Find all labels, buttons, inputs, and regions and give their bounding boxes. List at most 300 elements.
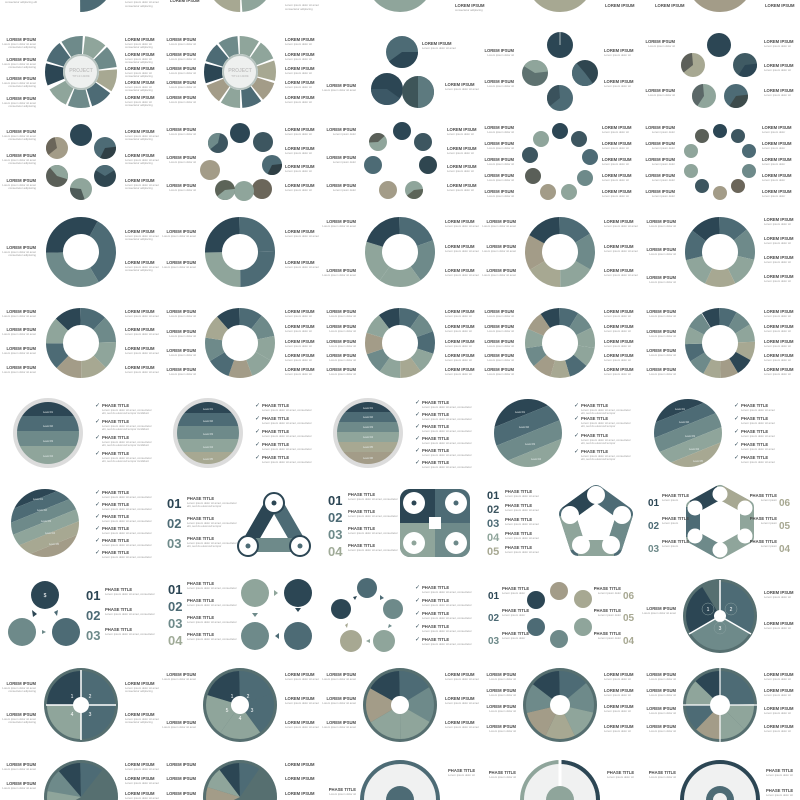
row 5 col 0 checklist: PHASE TITLE <box>102 403 129 408</box>
row 6 col 2: numbered list 01-04: 03 <box>328 527 342 542</box>
row 6 col 0 checklist: ✓ <box>95 525 100 532</box>
row 5 col 1 checklist: Lorem ipsum dolor sit amet, consectetur <box>262 421 312 425</box>
row 2 col 4: ten small pies ring: Lorem ipsum dolor <box>762 178 785 182</box>
row 3 col 1: four segment donut: LOREM IPSUM <box>166 260 197 265</box>
row 4 col 0: eight segment donut: Lorem ipsum dolor sit amet <box>125 351 159 355</box>
row 2 col 0: six small pies ring: consectetur adipiscing <box>8 137 36 141</box>
row 3 col 2: five segment donut: Lorem ipsum dolor sit amet <box>322 273 356 277</box>
row 6 col 2: numbered list 01-04: PHASE TITLE <box>348 492 375 497</box>
row 5 col 4 checklist: PHASE TITLE <box>741 442 768 447</box>
row 7 col 3: six circle cycle with numbers: 01 <box>488 591 500 602</box>
row 1 col 3: four pies: LOREM IPSUM <box>604 48 634 53</box>
row 7 col 0: three circle cycle: $ <box>44 593 47 599</box>
row 7 col 2: five circle cycle: PHASE TITLE <box>422 598 449 603</box>
row 5 col 2 checklist: Lorem ipsum dolor sit amet, consectetur <box>422 441 472 445</box>
row 5 col 0 checklist: elit, sed do eiusmod tempor incididunt <box>102 427 149 431</box>
row 3 col 2: five segment donut <box>322 219 479 278</box>
row 7 col 2: five circle cycle: Lorem ipsum dolor sit amet, consectetur <box>422 590 472 594</box>
row 8 col 2: six segment numbered pie: LOREM IPSUM <box>445 672 475 677</box>
row 8 col 2: six segment numbered pie: LOREM IPSUM <box>326 672 357 677</box>
row 4 col 3: eleven segment donut <box>484 309 634 376</box>
row 8 col 2: six segment numbered pie: Lorem ipsum dolor sit amet <box>445 725 479 729</box>
row 8 col 1: five segment numbered pie: 2 <box>247 694 250 700</box>
row 9: partial pies and rings at bottom: Lorem ipsum dolor sit amet <box>125 767 159 771</box>
row 5 col 3 checklist: elit, sed do eiusmod tempor <box>581 411 615 415</box>
row 8 col 0: four segment numbered pie: LOREM IPSUM <box>125 712 155 717</box>
row 3 col 3: six segment donut <box>482 219 638 278</box>
row 6 col 1: numbered list 01-03: PHASE TITLE <box>187 516 214 521</box>
row 4 col 3: eleven segment donut: Lorem ipsum dolor sit <box>487 314 514 318</box>
row 8 col 1: five segment numbered pie: LOREM IPSUM <box>166 672 197 677</box>
row 3 col 4: seven segment donut: LOREM IPSUM <box>764 255 794 260</box>
row 8 col 0: four segment numbered pie: 2 <box>89 694 92 700</box>
row 1 col 0 texts <box>2 37 155 108</box>
row 7 col 4: three segment numbered pie: Lorem ipsum dolor sit <box>764 626 791 630</box>
row 6 col 3: numbered list 01-05: Lorem ipsum dolor sit amet <box>505 550 539 554</box>
row 1 col 3: four pies: Lorem ipsum dolor sit <box>487 84 514 88</box>
row 5 col 4 checklist: PHASE TITLE <box>741 416 768 421</box>
row 3 col 1: four segment donut: LOREM IPSUM <box>285 260 315 265</box>
row 7 col 3: six circle cycle with numbers: PHASE TITLE <box>502 586 529 591</box>
row 6 col 0: tilted band circle 6 levels <box>11 489 79 557</box>
row 2 col 3: nine small pies ring: Lorem ipsum dolor sit <box>487 146 514 150</box>
row 1 col 3: four pies: Lorem ipsum dolor sit <box>604 53 631 57</box>
row 4 col 3: eleven segment donut: Lorem ipsum dolor sit <box>604 372 631 376</box>
row 5 col 3 checklist <box>574 402 631 461</box>
row 8 col 0: four segment numbered pie: LOREM IPSUM <box>6 712 37 717</box>
row 5 col 3 checklist: Lorem ipsum dolor sit amet, consectetur <box>581 421 631 425</box>
row 1 col 0 texts: consectetur adipiscing <box>125 60 153 64</box>
row 5 col 4 checklist: ✓ <box>734 415 739 422</box>
row 7 col 3: six circle cycle with numbers: Lorem ipsum dolor <box>502 636 525 640</box>
row 3 col 2: five segment donut: LOREM IPSUM <box>445 268 475 273</box>
row 2 col 4: ten small pies ring: Lorem ipsum dolor <box>652 194 675 198</box>
row 5 col 0 checklist: Lorem ipsum dolor sit amet, consectetur <box>102 440 152 444</box>
row 1 col 1 texts: LOREM IPSUM <box>285 52 315 57</box>
row 6 col 1: numbered list 01-03: elit, sed do eiusmod tempor <box>187 544 221 548</box>
row 5 col 2 checklist: ✓ <box>415 459 420 466</box>
row 5 col 1 checklist <box>255 402 312 464</box>
row 6 col 4: hexagon cycle with numbers: Lorem ipsum <box>662 544 679 548</box>
row 8 col 3: seven segment numbered pie: LOREM IPSUM <box>604 724 634 729</box>
row 5 col 1: layered circle 5 levels: Level 03 <box>203 432 213 436</box>
row 7 col 3: six circle cycle with numbers: Lorem ipsum dolor <box>598 613 621 617</box>
row 5 col 4: tilted band circle 5 levels: Level 05 <box>693 459 703 463</box>
row 8 col 4: eight segment numbered pie <box>646 668 794 742</box>
row 2 col 0: six small pies ring: LOREM IPSUM <box>6 178 37 183</box>
row 1 col 2: three pies: Lorem ipsum dolor sit amet <box>422 46 456 50</box>
row 5 col 2 checklist: PHASE TITLE <box>422 460 449 465</box>
row 4 col 0: eight segment donut: LOREM IPSUM <box>125 309 155 314</box>
row 8 col 3: seven segment numbered pie: Lorem ipsum dolor sit <box>489 709 516 713</box>
row 3 col 3: six segment donut: Lorem ipsum dolor sit amet <box>604 224 638 228</box>
row 8 col 3: seven segment numbered pie: LOREM IPSUM <box>604 672 634 677</box>
row 8 col 4: eight segment numbered pie: LOREM IPSUM <box>764 688 794 693</box>
row 7 col 3: six circle cycle with numbers: 02 <box>488 613 500 624</box>
row 6 col 3: pentagon cycle <box>561 486 631 554</box>
row 3 col 1: four segment donut: LOREM IPSUM <box>166 229 197 234</box>
row 4 col 1: nine segment donut: LOREM IPSUM <box>166 348 197 353</box>
row 9: partial pies and rings at bottom <box>2 758 793 800</box>
row 1 col 1: ten segment ring: PROJECT <box>228 68 252 74</box>
row 5 col 2 checklist: Lorem ipsum dolor sit amet, consectetur <box>422 429 472 433</box>
row 9: partial pies and rings at bottom: LOREM IPSUM <box>125 776 155 781</box>
row 8 col 4: eight segment numbered pie: Lorem ipsum dolor sit <box>649 729 676 733</box>
row 6 col 3: numbered list 01-05: Lorem ipsum dolor sit amet <box>505 536 539 540</box>
row 4 col 0: eight segment donut: Lorem ipsum dolor sit amet <box>125 332 159 336</box>
row 5 col 2: layered circle 6 levels: Level 03 <box>363 425 373 429</box>
row 3 col 4: seven segment donut: LOREM IPSUM <box>764 236 794 241</box>
row 4 col 0: eight segment donut: Lorem ipsum dolor sit amet <box>2 332 36 336</box>
row 6 col 0 checklist: Lorem ipsum dolor sit amet, consectetur <box>102 507 152 511</box>
row 6 col 4: hexagon cycle with numbers: PHASE TITLE <box>750 539 777 544</box>
row 2 col 1: eight small pies ring: LOREM IPSUM <box>285 127 315 132</box>
row 6 col 4: hexagon cycle with numbers: Lorem ipsum <box>662 498 679 502</box>
row 2 col 3: nine small pies ring: LOREM IPSUM <box>602 125 632 130</box>
row 4 col 2: ten segment donut <box>326 309 475 376</box>
row 7 col 1: four circle cycle: 01 <box>168 582 182 597</box>
row 8 col 4: eight segment numbered pie: Lorem ipsum dolor sit <box>649 693 676 697</box>
row 5 col 2 checklist: ✓ <box>415 423 420 430</box>
row 5 col 0: layered circle 4 levels: Level 02 <box>43 424 53 428</box>
row 5 col 3 checklist: PHASE TITLE <box>581 433 608 438</box>
row 4 col 3: eleven segment donut: Lorem ipsum dolor sit <box>604 329 631 333</box>
row 7 col 2: five circle cycle: PHASE TITLE <box>422 624 449 629</box>
row 3 col 0: three segment donut: consectetur adipiscing <box>125 268 153 272</box>
row 2 col 1: eight small pies ring: LOREM IPSUM <box>166 183 197 188</box>
row 7 col 4: three segment numbered pie: 1 <box>707 607 710 613</box>
row 5 col 0 checklist: ✓ <box>95 402 100 409</box>
row 3 col 4: seven segment donut <box>646 217 794 284</box>
row 2 col 4: ten small pies ring: LOREM IPSUM <box>645 173 676 178</box>
row 7 col 2: five circle cycle: ✓ <box>415 636 420 643</box>
row 4 col 3: eleven segment donut: LOREM IPSUM <box>484 309 515 314</box>
row 2 col 1: eight small pies ring: Lorem ipsum dolor sit <box>169 132 196 136</box>
row 3 col 3: six segment donut: Lorem ipsum dolor sit amet <box>604 249 638 253</box>
row 9: partial pies and rings at bottom: PHASE TITLE <box>766 768 793 773</box>
row 4 col 4: twelve segment donut: LOREM IPSUM <box>646 309 677 314</box>
row 1 col 2: three pies: LOREM IPSUM <box>422 41 452 46</box>
row 1 col 0 texts: Lorem ipsum dolor sit amet <box>2 81 36 85</box>
row 8 col 4: eight segment numbered pie: Lorem ipsum dolor sit <box>649 677 676 681</box>
row 4 col 1: nine segment donut: Lorem ipsum dolor sit <box>169 314 196 318</box>
row 3 col 4: seven segment donut: Lorem ipsum dolor sit <box>764 279 791 283</box>
row 6 col 1: numbered list 01-03: elit, sed do eiusmod tempor <box>187 504 221 508</box>
row 1 col 1 texts: LOREM IPSUM <box>285 37 315 42</box>
row 1 col 1 texts: Lorem ipsum dolor sit <box>169 57 196 61</box>
row 8 col 3: seven segment numbered pie: Lorem ipsum dolor sit <box>604 709 631 713</box>
row 1 col 0 texts: LOREM IPSUM <box>125 37 155 42</box>
row 1 col 1 texts: Lorem ipsum dolor sit <box>169 85 196 89</box>
row 4 col 2: ten segment donut: LOREM IPSUM <box>445 353 475 358</box>
row 5 col 2 checklist <box>415 399 472 469</box>
row 7 col 4: three segment numbered pie: Lorem ipsum dolor sit amet <box>642 611 676 615</box>
row 7 col 0: three circle cycle: 03 <box>86 628 100 643</box>
row 8 col 2: six segment numbered pie: Lorem ipsum dolor sit amet <box>445 701 479 705</box>
row 3 col 1: four segment donut: Lorem ipsum dolor sit amet <box>162 265 196 269</box>
row 1 col 4: five pies: LOREM IPSUM <box>764 88 794 93</box>
row 6 col 4: hexagon cycle with numbers: PHASE TITLE <box>662 516 689 521</box>
row 1 col 0 texts: LOREM IPSUM <box>6 37 37 42</box>
row 6 col 0 checklist: ✓ <box>95 537 100 544</box>
row 8 col 2: six segment numbered pie <box>322 668 479 742</box>
row 2 col 3: nine small pies ring: Lorem ipsum dolor sit <box>602 146 629 150</box>
row 6 col 4: hexagon cycle with numbers: 03 <box>648 544 660 555</box>
row 2 col 2: seven small pies ring: LOREM IPSUM <box>447 164 477 169</box>
row 6 col 0: tilted band circle 6 levels: Level 02 <box>37 508 47 512</box>
row 3 col 1: four segment donut: Lorem ipsum dolor sit amet <box>285 265 319 269</box>
row 1 col 1 texts: LOREM IPSUM <box>166 37 197 42</box>
row 6 col 1: numbered list 01-03: Lorem ipsum dolor sit amet, consectetur <box>187 521 237 525</box>
row 4 col 4: twelve segment donut: LOREM IPSUM <box>764 339 794 344</box>
row 7 col 1: four circle cycle <box>168 579 312 650</box>
row 3 col 3: six segment donut: LOREM IPSUM <box>486 268 517 273</box>
row 5 col 4 checklist: PHASE TITLE <box>741 455 768 460</box>
row 6 col 4: hexagon cycle with numbers: PHASE TITLE <box>662 493 689 498</box>
row 5 col 3: tilted band circle 4 levels: Level 02 <box>519 425 529 429</box>
row 1 col 0: nine segment ring with project title: TITLE HERE <box>72 74 90 78</box>
row 6 col 3: numbered list 01-05: 02 <box>487 504 499 516</box>
row 4 col 2: ten segment donut: Lorem ipsum dolor sit <box>329 344 356 348</box>
row 6 col 0 checklist: Lorem ipsum dolor sit amet, consectetur <box>102 519 152 523</box>
row 1 col 0 texts: Lorem ipsum dolor sit <box>125 57 152 61</box>
row 5 col 4: tilted band circle 5 levels: Level 01 <box>675 407 685 411</box>
row 8 col 3: seven segment numbered pie: LOREM IPSUM <box>604 688 634 693</box>
row 2 col 3: nine small pies ring: Lorem ipsum dolor sit <box>487 194 514 198</box>
row 1 col 1 texts: LOREM IPSUM <box>166 66 197 71</box>
row 4 col 2: ten segment donut: Lorem ipsum dolor sit <box>445 372 472 376</box>
row 2 col 1: eight small pies ring: Lorem ipsum dolor sit <box>169 188 196 192</box>
row 4 col 3: eleven segment donut: Lorem ipsum dolor sit <box>604 358 631 362</box>
row 1 col 0 texts: Lorem ipsum dolor sit amet <box>2 42 36 46</box>
row 6 col 3: numbered list 01-05: 05 <box>487 546 499 558</box>
row 7 col 1: four circle cycle: Lorem ipsum dolor sit amet, consectetur <box>187 586 237 590</box>
row 8 col 2: six segment numbered pie: LOREM IPSUM <box>445 696 475 701</box>
row 2 col 4: ten small pies ring: LOREM IPSUM <box>762 157 792 162</box>
row 9: partial pies and rings at bottom: LOREM IPSUM <box>285 762 315 767</box>
row 7 col 3: six circle cycle with numbers: 05 <box>623 613 635 624</box>
row 5 col 3: tilted band circle 4 levels: Level 04 <box>531 457 541 461</box>
row 2 col 2: seven small pies ring: Lorem ipsum dolor <box>333 160 356 164</box>
row 4 col 2: ten segment donut: LOREM IPSUM <box>326 324 357 329</box>
row 5 col 3 checklist: ✓ <box>574 432 579 439</box>
row 1 col 0 texts: LOREM IPSUM <box>6 76 37 81</box>
row 5 col 2: layered circle 6 levels: Level 04 <box>363 435 373 439</box>
row 6 col 2: numbered list 01-04: PHASE TITLE <box>348 509 375 514</box>
row 5 col 0: layered circle 4 levels: Level 03 <box>43 439 53 443</box>
row 9: partial pies and rings at bottom: PHASE TITLE <box>489 770 516 775</box>
row 4 col 4: twelve segment donut: Lorem ipsum dolor sit <box>764 358 791 362</box>
row 8 col 3: seven segment numbered pie: LOREM IPSUM <box>486 688 517 693</box>
row 1 col 4: five pies: Lorem ipsum dolor sit <box>764 93 791 97</box>
row 9: partial pies and rings at bottom: Lorem ipsum dolor sit amet <box>125 796 159 800</box>
row 5 col 2 checklist: ✓ <box>415 447 420 454</box>
row 6 col 2: numbered list 01-04: 01 <box>328 493 342 508</box>
row 6 col 3: numbered list 01-05: Lorem ipsum dolor sit amet <box>505 508 539 512</box>
row 7 col 4: three segment numbered pie: 2 <box>730 607 733 613</box>
row 5 col 0 checklist: elit, sed do eiusmod tempor incididunt <box>102 443 149 447</box>
row 6 col 3: numbered list 01-05: Lorem ipsum dolor sit amet <box>505 494 539 498</box>
row 3 col 4: seven segment donut: Lorem ipsum dolor sit <box>649 252 676 256</box>
row 1 col 1 texts: LOREM IPSUM <box>166 52 197 57</box>
row 1 col 0 texts: Lorem ipsum dolor sit <box>125 100 152 104</box>
row 8 col 3: seven segment numbered pie: Lorem ipsum dolor sit <box>489 729 516 733</box>
row 9: partial pies and rings at bottom: LOREM IPSUM <box>166 762 197 767</box>
row 6 col 0: tilted band circle 6 levels: Level 01 <box>33 497 43 501</box>
row 0: partial pies at top: consectetur adipiscing <box>455 8 483 12</box>
row 8 col 3: seven segment numbered pie: Lorem ipsum dolor sit <box>604 729 631 733</box>
row 3 col 3: six segment donut: LOREM IPSUM <box>486 244 517 249</box>
row 7 col 1: four circle cycle: PHASE TITLE <box>187 598 214 603</box>
row 8 col 0: four segment numbered pie: 4 <box>71 712 74 718</box>
row 2 col 1: eight small pies ring: LOREM IPSUM <box>285 146 315 151</box>
row 3 col 4: seven segment donut: LOREM IPSUM <box>764 217 794 222</box>
row 6 col 0 checklist: PHASE TITLE <box>102 550 129 555</box>
row 3 col 4: seven segment donut: Lorem ipsum dolor sit <box>649 280 676 284</box>
row 1 col 4: five pies: LOREM IPSUM <box>645 39 676 44</box>
row 5 col 1 checklist: Lorem ipsum dolor sit amet, consectetur <box>262 447 312 451</box>
row 1 col 0 texts: LOREM IPSUM <box>6 57 37 62</box>
row 5 col 1 checklist: ✓ <box>255 402 260 409</box>
row 9: partial pies and rings at bottom: Lorem ipsum dolor sit <box>766 773 793 777</box>
row 2 col 3: nine small pies ring: LOREM IPSUM <box>602 189 632 194</box>
row 2 col 4: ten small pies ring: Lorem ipsum dolor <box>652 178 675 182</box>
row 3 col 1: four segment donut: Lorem ipsum dolor sit amet <box>162 234 196 238</box>
row 1 col 0 texts: Lorem ipsum dolor sit <box>125 42 152 46</box>
row 9: partial pies and rings at bottom: PHASE TITLE <box>329 787 356 792</box>
row 1 col 0 texts: Lorem ipsum dolor sit <box>125 71 152 75</box>
row 6 col 2: numbered list 01-04: 02 <box>328 510 342 525</box>
row 9: partial pies and rings at bottom: Lorem ipsum dolor sit <box>329 792 356 796</box>
row 0: partial pies at top: consectetur adipiscing <box>125 4 153 8</box>
row 1 col 1 texts: LOREM IPSUM <box>285 66 315 71</box>
row 4 col 2: ten segment donut: Lorem ipsum dolor sit <box>445 358 472 362</box>
row 8 col 4: eight segment numbered pie: LOREM IPSUM <box>764 672 794 677</box>
row 7 col 2: five circle cycle: Lorem ipsum dolor sit amet, consectetur <box>422 603 472 607</box>
row 5 col 2 checklist: PHASE TITLE <box>422 412 449 417</box>
row 7 col 2: five circle cycle: Lorem ipsum dolor sit amet, consectetur <box>422 616 472 620</box>
row 6 col 2: numbered list 01-04: Lorem ipsum dolor sit amet, consectetur <box>348 531 398 535</box>
row 6 col 4: hexagon cycle with numbers: Lorem ipsum <box>761 544 778 548</box>
row 2 col 0: six small pies ring: LOREM IPSUM <box>125 153 155 158</box>
row 8 col 0: four segment numbered pie: LOREM IPSUM <box>125 681 155 686</box>
row 4 col 2: ten segment donut: LOREM IPSUM <box>326 367 357 372</box>
row 7 col 1: four circle cycle: Lorem ipsum dolor sit amet, consectetur <box>187 637 237 641</box>
row 4 col 4: twelve segment donut: Lorem ipsum dolor sit <box>649 353 676 357</box>
row 7 col 0: three circle cycle: Lorem ipsum dolor sit amet, consectetur <box>105 592 155 596</box>
row 6 col 1: numbered list 01-03: 02 <box>167 516 181 531</box>
row 5 col 3 checklist: Lorem ipsum dolor sit amet, consectetur <box>581 454 631 458</box>
row 4 col 0: eight segment donut: LOREM IPSUM <box>6 365 37 370</box>
row 2 col 2: seven small pies ring: Lorem ipsum dolor sit <box>447 132 474 136</box>
row 2 col 4: ten small pies ring: Lorem ipsum dolor <box>762 162 785 166</box>
row 1 col 0 texts: Lorem ipsum dolor sit amet <box>2 101 36 105</box>
row 3 col 2: five segment donut: LOREM IPSUM <box>445 244 475 249</box>
row 8 col 3: seven segment numbered pie: LOREM IPSUM <box>486 672 517 677</box>
row 2 col 0: six small pies ring: consectetur adipiscing <box>125 161 153 165</box>
row 8 col 4: eight segment numbered pie: Lorem ipsum dolor sit <box>764 693 791 697</box>
row 3 col 0: three segment donut: LOREM IPSUM <box>6 245 37 250</box>
row 2 col 4: ten small pies ring: Lorem ipsum dolor <box>762 130 785 134</box>
row 7 col 3: six circle cycle with numbers: 03 <box>488 636 500 647</box>
row 6 col 0: tilted band circle 6 levels: Level 03 <box>41 519 51 523</box>
row 8 col 0: four segment numbered pie: consectetur adipiscing <box>8 720 36 724</box>
row 3 col 2: five segment donut: LOREM IPSUM <box>326 219 357 224</box>
row 2 col 4: ten small pies ring: Lorem ipsum dolor <box>762 194 785 198</box>
row 2 col 1: eight small pies ring: Lorem ipsum dolor sit <box>285 132 312 136</box>
row 1 col 4: five pies: Lorem ipsum dolor sit <box>648 93 675 97</box>
row 2 col 0: six small pies ring: Lorem ipsum dolor sit amet <box>125 183 159 187</box>
row 2 col 4: ten small pies ring: LOREM IPSUM <box>762 125 792 130</box>
row 2 col 3: nine small pies ring: Lorem ipsum dolor sit <box>602 194 629 198</box>
row 8 col 1: five segment numbered pie: 3 <box>251 708 254 714</box>
row 1 col 0: nine segment ring with project title: PROJECT <box>69 68 93 74</box>
row 2 col 0: six small pies ring: LOREM IPSUM <box>125 178 155 183</box>
row 9: partial pies and rings at bottom: Lorem ipsum dolor sit amet <box>2 786 36 790</box>
row 8 col 0: four segment numbered pie <box>2 668 159 742</box>
row 8 col 0: four segment numbered pie: consectetur adipiscing <box>8 689 36 693</box>
row 2 col 1: eight small pies ring <box>166 123 315 201</box>
row 8 col 1: five segment numbered pie: 4 <box>239 716 242 722</box>
row 4 col 1: nine segment donut: Lorem ipsum dolor sit <box>285 358 312 362</box>
row 6 col 3: numbered list 01-05: PHASE TITLE <box>505 545 532 550</box>
row 6 col 0 checklist: PHASE TITLE <box>102 526 129 531</box>
row 7 col 3: six circle cycle with numbers: 04 <box>623 636 635 647</box>
row 5 col 4 checklist: Lorem ipsum dolor sit amet <box>741 460 775 464</box>
row 8 col 1: five segment numbered pie: LOREM IPSUM <box>166 720 197 725</box>
row 6 col 1: numbered list 01-03: PHASE TITLE <box>187 536 214 541</box>
row 5 col 2 checklist: Lorem ipsum dolor sit amet, consectetur <box>422 453 472 457</box>
row 1 col 3: four pies: LOREM IPSUM <box>604 79 634 84</box>
row 5 col 2 checklist: ✓ <box>415 435 420 442</box>
row 4 col 2: ten segment donut: Lorem ipsum dolor sit <box>329 372 356 376</box>
row 4 col 3: eleven segment donut: Lorem ipsum dolor sit <box>487 344 514 348</box>
row 5 col 4 checklist: ✓ <box>734 402 739 409</box>
row 4 col 4: twelve segment donut: Lorem ipsum dolor sit <box>764 372 791 376</box>
row 3 col 2: five segment donut: Lorem ipsum dolor sit amet <box>322 224 356 228</box>
row 4 col 1: nine segment donut: Lorem ipsum dolor sit <box>285 329 312 333</box>
row 0: partial pies at top: LOREM IPSUM <box>765 3 795 8</box>
row 9: partial pies and rings at bottom: PHASE TITLE <box>607 770 634 775</box>
row 7 col 3: six circle cycle with numbers: PHASE TITLE <box>594 631 621 636</box>
row 7 col 0: three circle cycle <box>8 581 155 646</box>
row 4 col 4: twelve segment donut: Lorem ipsum dolor sit <box>764 314 791 318</box>
row 5 col 0 checklist: elit, sed do eiusmod tempor incididunt <box>102 459 149 463</box>
row 5 col 3 checklist: PHASE TITLE <box>581 403 608 408</box>
row 8 col 1: five segment numbered pie: LOREM IPSUM <box>285 672 315 677</box>
row 1 col 0 texts: consectetur adipiscing <box>125 103 153 107</box>
row 4 col 3: eleven segment donut: LOREM IPSUM <box>484 324 515 329</box>
row 7 col 2: five circle cycle: PHASE TITLE <box>422 611 449 616</box>
row 7 col 0: three circle cycle: PHASE TITLE <box>105 607 132 612</box>
row 1 col 2: three pies: LOREM IPSUM <box>445 82 475 87</box>
row 6 col 0 checklist: PHASE TITLE <box>102 538 129 543</box>
row 1 col 1 texts: Lorem ipsum dolor sit <box>285 42 312 46</box>
row 4 col 3: eleven segment donut: LOREM IPSUM <box>604 367 634 372</box>
row 2 col 2: seven small pies ring: Lorem ipsum dolor <box>333 188 356 192</box>
row 6 col 0 checklist: ✓ <box>95 549 100 556</box>
row 8 col 4: eight segment numbered pie: LOREM IPSUM <box>764 724 794 729</box>
row 2 col 2: seven small pies ring: Lorem ipsum dolor sit <box>447 151 474 155</box>
row 7 col 3: six circle cycle with numbers: Lorem ipsum dolor <box>502 591 525 595</box>
row 8 col 0: four segment numbered pie: Lorem ipsum dolor sit amet <box>125 717 159 721</box>
row 7 col 0: three circle cycle: Lorem ipsum dolor sit amet, consectetur <box>105 632 155 636</box>
row 3 col 1: four segment donut: Lorem ipsum dolor sit amet <box>285 234 319 238</box>
row 0: partial pies at top: LOREM IPSUM <box>455 3 485 8</box>
row 9: partial pies and rings at bottom: LOREM IPSUM <box>285 776 315 781</box>
row 1 col 2: three pies: Lorem ipsum dolor sit amet <box>445 87 479 91</box>
row 4 col 2: ten segment donut: LOREM IPSUM <box>445 309 475 314</box>
